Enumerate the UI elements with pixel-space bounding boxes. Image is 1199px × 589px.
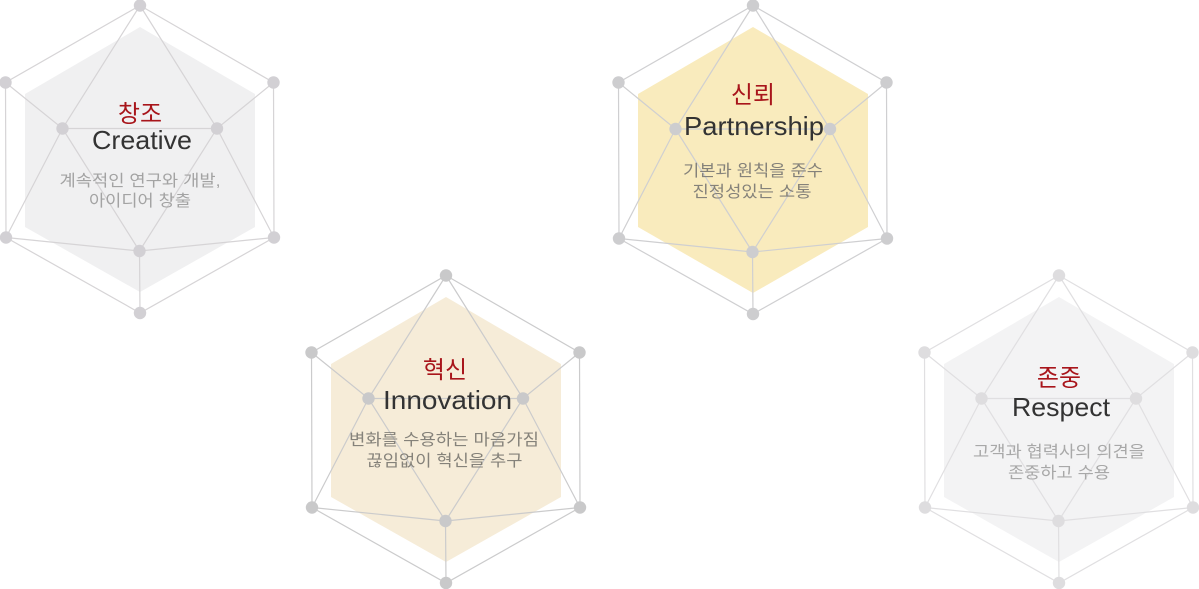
heading: Innovation: Innovation xyxy=(383,385,512,415)
network lines: Innovation xyxy=(312,276,580,583)
heading: Creative: Creative xyxy=(92,125,192,155)
description: Partnership: 진정성있는 소통 xyxy=(692,183,812,201)
hexagon fill: Innovation xyxy=(331,297,561,562)
panel: Partnership hexagon xyxy=(612,0,893,320)
heading: 창조: 창조 xyxy=(118,101,162,128)
network lines: Creative xyxy=(6,6,274,313)
network nodes: Partnership xyxy=(612,0,893,320)
heading: Respect: Respect xyxy=(1012,392,1111,422)
hexagon fill: Creative xyxy=(25,27,255,292)
heading: 신뢰: 신뢰 xyxy=(731,82,775,109)
hexagon fill: Partnership xyxy=(638,27,868,293)
description: Creative xyxy=(60,172,220,210)
network nodes: Innovation xyxy=(305,269,586,589)
description: Respect: 고객과 협력사의 의견을 xyxy=(973,443,1145,461)
panel: Respect hexagon xyxy=(918,269,1199,589)
description: Innovation xyxy=(349,431,539,470)
network nodes: Respect xyxy=(918,269,1199,589)
description: Respect xyxy=(973,443,1145,482)
panel: Creative hexagon xyxy=(0,0,280,319)
description: Creative: 계속적인 연구와 개발, xyxy=(60,172,220,190)
description: Innovation: 끊임없이 혁신을 추구 xyxy=(366,452,522,470)
network nodes: Creative xyxy=(0,0,280,319)
heading: 혁신: 혁신 xyxy=(423,357,467,384)
network lines: Partnership xyxy=(618,6,887,314)
description: Innovation: 변화를 수용하는 마음가짐 xyxy=(349,431,539,449)
description: Partnership xyxy=(683,162,823,201)
heading: Partnership: Partnership xyxy=(684,111,824,141)
heading: 존중: 존중 xyxy=(1037,365,1081,392)
description: Partnership: 기본과 원칙을 준수 xyxy=(683,162,823,180)
hexagon fill: Respect xyxy=(944,297,1174,562)
description: Creative: 아이디어 창출 xyxy=(89,192,191,210)
panel: Innovation hexagon xyxy=(305,269,586,589)
description: Respect: 존중하고 수용 xyxy=(1008,464,1110,482)
network lines: Respect xyxy=(924,276,1193,583)
